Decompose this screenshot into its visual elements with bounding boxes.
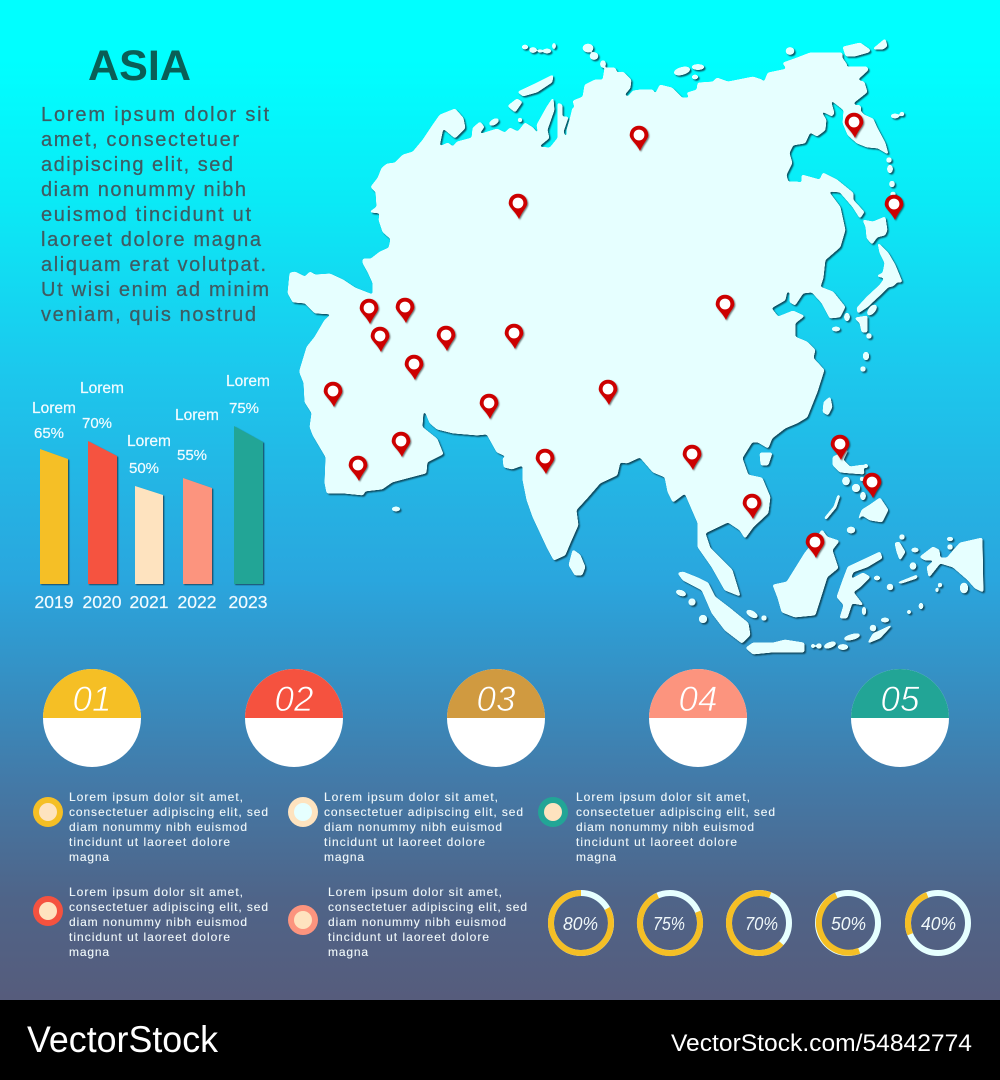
legend item 4: diam nonummy nibh euismod: [69, 915, 247, 929]
legend item 5: consectetuer adipiscing elit, sed: [328, 900, 527, 914]
bar labels: 65%: [34, 425, 64, 442]
numbered circle 02: 02: [275, 680, 313, 719]
intro paragraph: laoreet dolore magna: [41, 229, 262, 251]
progress ring 40%: 40%: [921, 914, 956, 934]
map location pins: [324, 113, 903, 558]
legend item 3: diam nonummy nibh euismod: [576, 820, 754, 834]
bar labels: Lorem: [32, 400, 76, 417]
bar 2022: [183, 478, 212, 584]
intro paragraph: adipiscing elit, sed: [41, 154, 233, 176]
year labels: 2023: [229, 592, 267, 612]
progress ring 50%: [818, 893, 878, 953]
bar labels: Lorem: [175, 407, 219, 424]
bar labels: 50%: [129, 460, 159, 477]
legend item 2: diam nonummy nibh euismod: [324, 820, 502, 834]
legend item 4: tincidunt ut laoreet dolore: [69, 930, 230, 944]
watermark url: VectorStock.com/54842774: [671, 1030, 972, 1057]
title: ASIA: [88, 42, 191, 90]
legend item 2: [288, 790, 523, 864]
progress ring 50%: 50%: [831, 914, 866, 934]
bar 2020: [88, 441, 117, 584]
watermark brand: VectorStock: [27, 1019, 218, 1060]
bar labels: 75%: [229, 400, 259, 417]
legend item 4: Lorem ipsum dolor sit amet,: [69, 885, 243, 899]
numbered circle 01: [43, 669, 141, 767]
legend item 2: Lorem ipsum dolor sit amet,: [324, 790, 498, 804]
intro paragraph: diam nonummy nibh: [41, 179, 246, 201]
legend item 1: consectetuer adipiscing elit, sed: [69, 805, 268, 819]
year labels: 2021: [130, 592, 168, 612]
intro paragraph: aliquam erat volutpat.: [41, 254, 266, 276]
Socotra island: [392, 507, 400, 511]
progress ring 70%: 70%: [745, 914, 778, 934]
Java and Lesser Sunda islands: [675, 589, 892, 654]
map of Asia: [288, 39, 983, 654]
Sumatra: [678, 572, 750, 643]
footer bar: [0, 1000, 1000, 1080]
intro paragraph: euismod tincidunt ut: [41, 204, 251, 226]
legend item 3: [538, 790, 775, 864]
numbered circle 03: [447, 669, 545, 767]
progress ring 40%: [908, 893, 968, 953]
legend item 1: tincidunt ut laoreet dolore: [69, 835, 230, 849]
progress ring 75%: 75%: [653, 914, 685, 934]
arctic islands: [488, 39, 887, 127]
intro paragraph: Lorem ipsum dolor sit: [41, 104, 269, 126]
Kuril islands: [855, 105, 904, 196]
legend item 5: Lorem ipsum dolor sit amet,: [328, 885, 502, 899]
bar labels: Lorem: [127, 433, 171, 450]
eastern Indonesia and New Guinea: [862, 534, 983, 615]
legend item 4: consectetuer adipiscing elit, sed: [69, 900, 268, 914]
numbered circle 05: 05: [881, 680, 920, 719]
bar 2023: [234, 426, 263, 584]
year labels: 2020: [83, 592, 122, 612]
Borneo: [773, 530, 839, 617]
legend item 2: tincidunt ut laoreet dolore: [324, 835, 485, 849]
progress ring 75%: [640, 893, 700, 953]
legend item 5: magna: [328, 945, 368, 959]
numbered circle 05: [851, 669, 949, 767]
year labels: 2019: [35, 592, 73, 612]
intro paragraph: veniam, quis nostrud: [41, 304, 256, 326]
legend item 5: tincidunt ut laoreet dolore: [328, 930, 489, 944]
legend item 1: Lorem ipsum dolor sit amet,: [69, 790, 243, 804]
mainland: [288, 53, 888, 596]
progress ring 70%: [729, 893, 789, 953]
bar labels: 70%: [82, 415, 112, 432]
legend item 5: diam nonummy nibh euismod: [328, 915, 506, 929]
legend item 5: [288, 885, 527, 959]
legend item 3: Lorem ipsum dolor sit amet,: [576, 790, 750, 804]
legend item 1: magna: [69, 850, 109, 864]
intro paragraph: amet, consectetuer: [41, 129, 239, 151]
numbered circle 02: [245, 669, 343, 767]
legend item 4: magna: [69, 945, 109, 959]
legend item 3: consectetuer adipiscing elit, sed: [576, 805, 775, 819]
intro paragraph: [41, 104, 269, 326]
Philippines: [825, 450, 888, 533]
numbered circle 04: [649, 669, 747, 767]
bar 2021: [135, 486, 163, 584]
Taiwan and Hainan: [760, 397, 832, 465]
Japan: [832, 217, 902, 372]
legend item 2: magna: [324, 850, 364, 864]
numbered circle 03: 03: [477, 680, 516, 719]
progress ring 80%: 80%: [563, 914, 598, 934]
bar 2019: [40, 449, 68, 584]
bar labels: Lorem: [226, 373, 270, 390]
legend item 1: diam nonummy nibh euismod: [69, 820, 247, 834]
intro paragraph: Ut wisi enim ad minim: [41, 279, 269, 301]
legend item 2: consectetuer adipiscing elit, sed: [324, 805, 523, 819]
progress ring 80%: [551, 893, 611, 953]
numbered circle 04: 04: [679, 680, 717, 719]
legend item 3: tincidunt ut laoreet dolore: [576, 835, 737, 849]
bar labels: 55%: [177, 447, 207, 464]
legend item 3: magna: [576, 850, 616, 864]
bar labels: [32, 373, 270, 477]
year labels: [35, 592, 267, 612]
year labels: 2022: [178, 592, 216, 612]
legend item 4: [33, 885, 268, 959]
bar chart: [32, 373, 270, 612]
Sulawesi: [837, 552, 882, 618]
numbered circle 01: 01: [73, 680, 111, 719]
legend item 1: [33, 790, 268, 864]
bar labels: Lorem: [80, 380, 124, 397]
Sri Lanka: [569, 550, 585, 575]
